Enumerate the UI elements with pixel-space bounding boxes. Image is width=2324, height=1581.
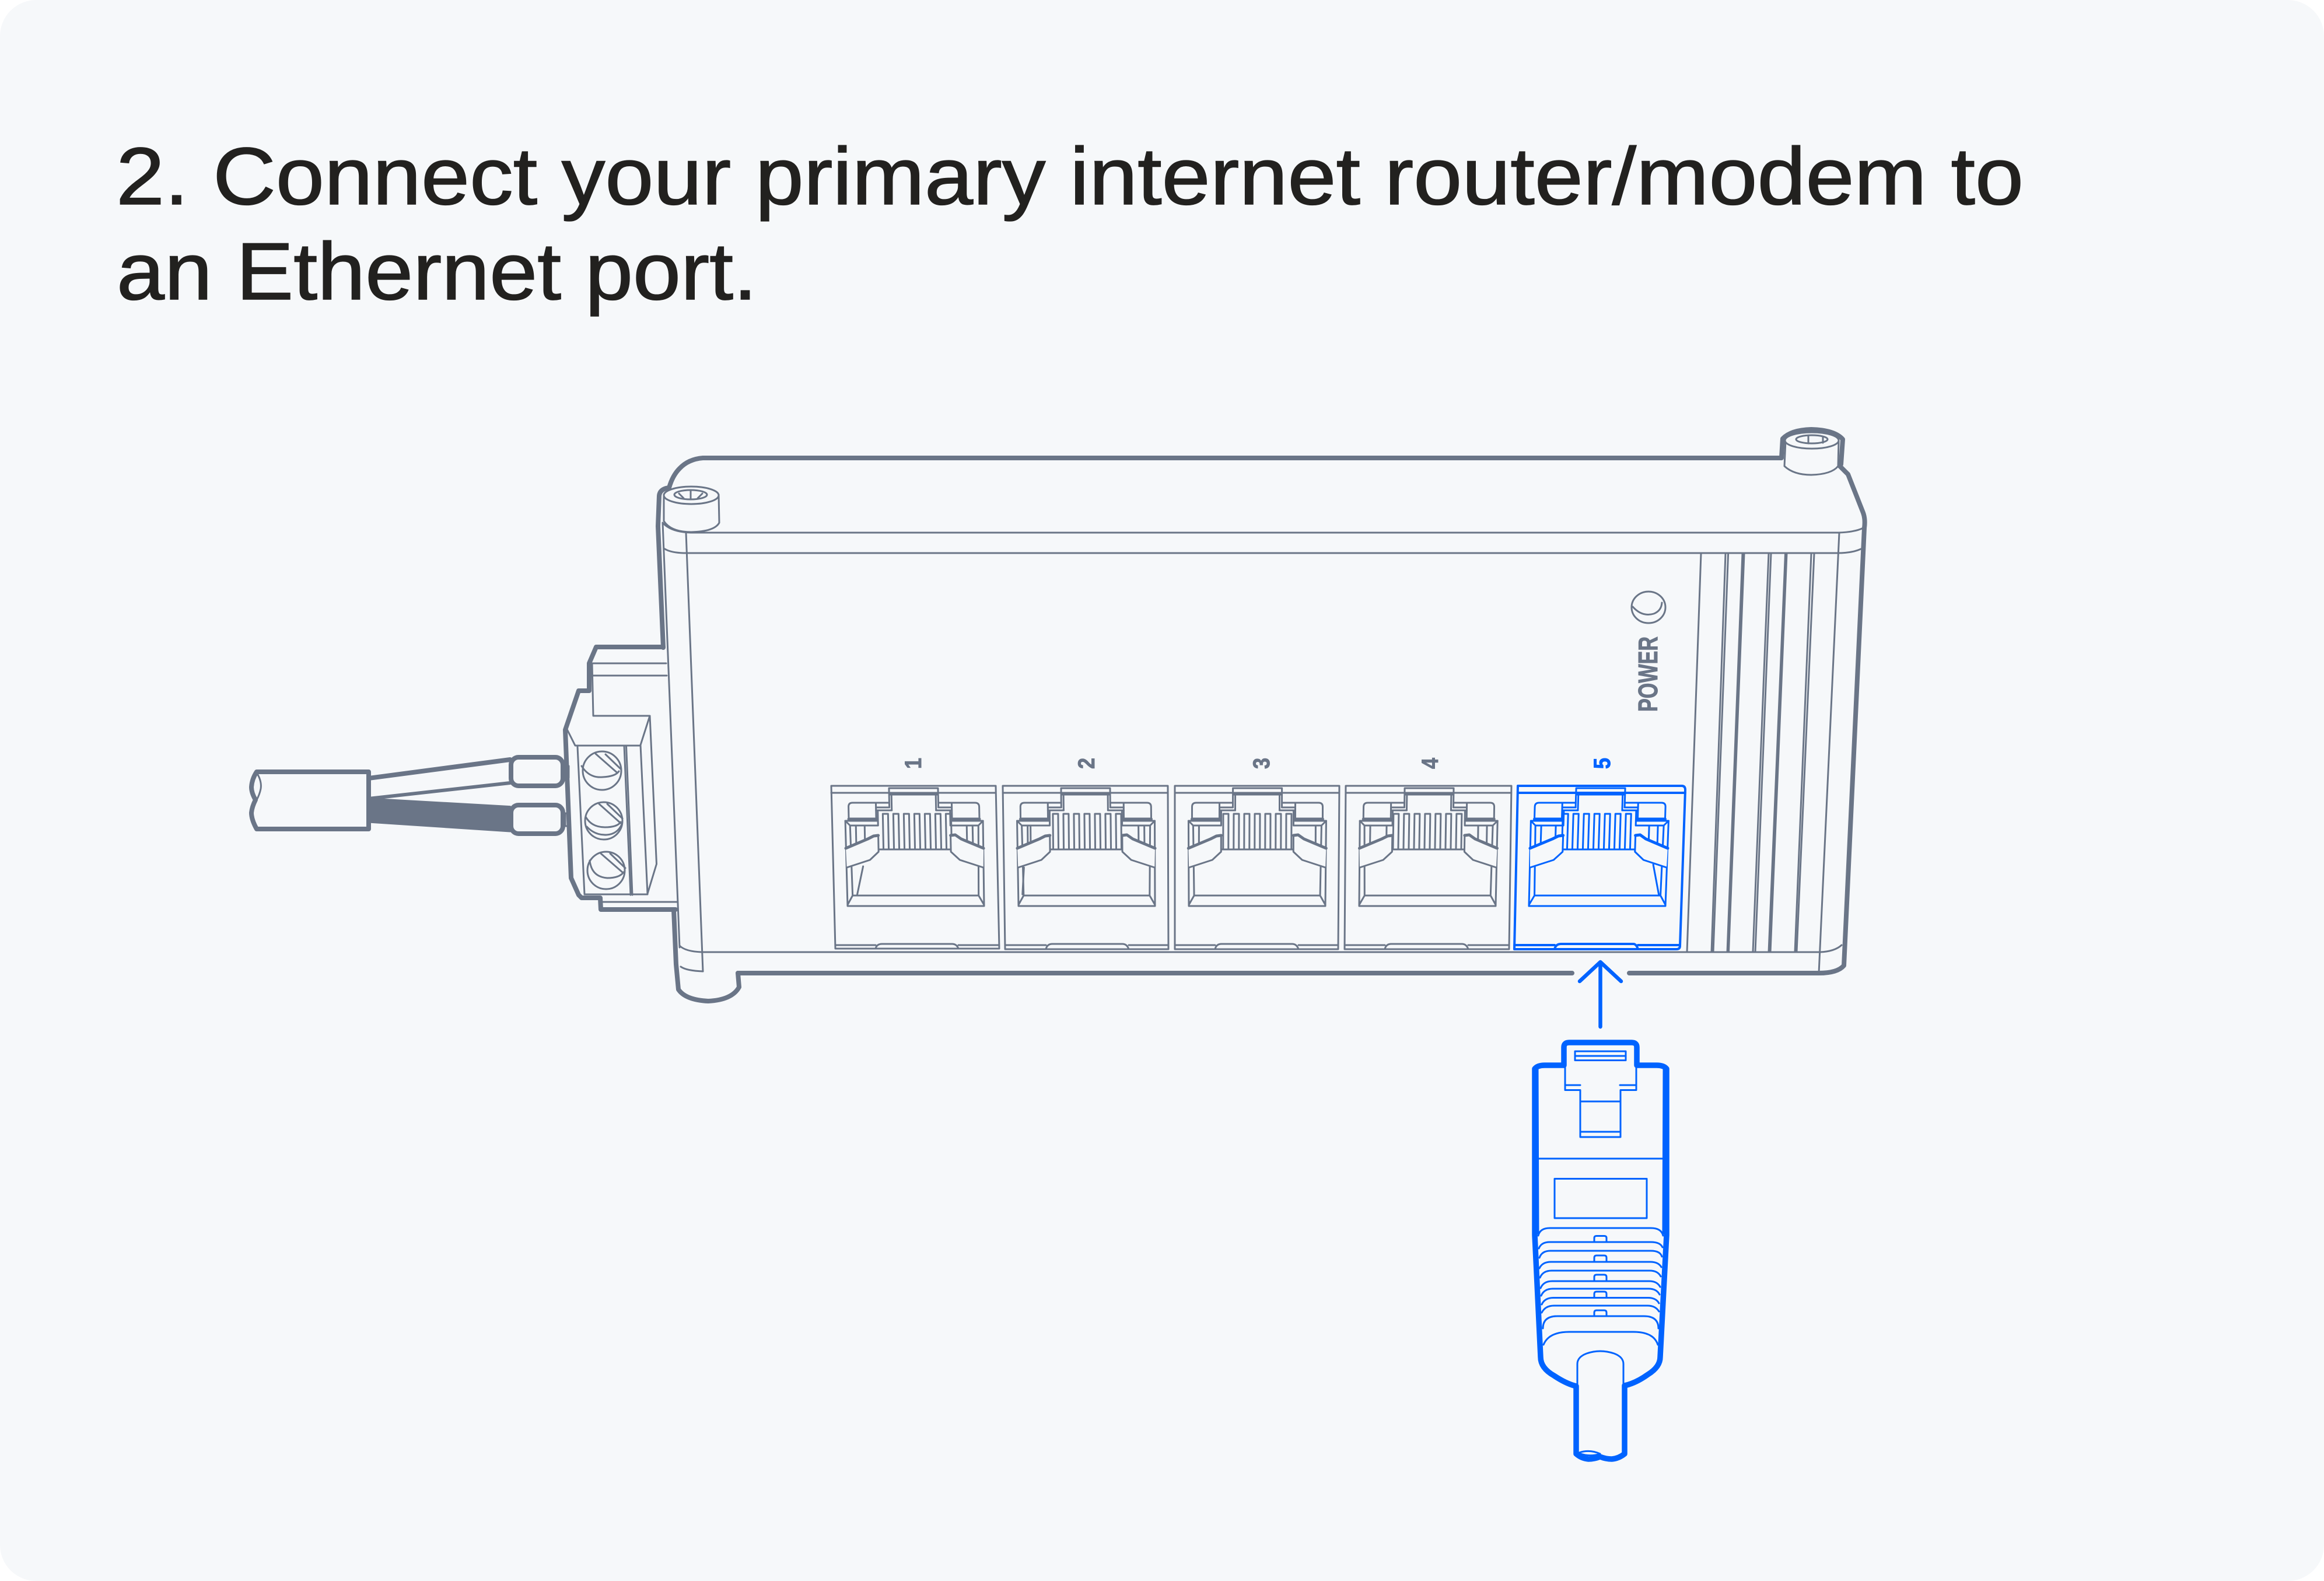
- ferrule upper: [511, 757, 569, 786]
- title: 2. Connect your primary internet router/modem to: [116, 131, 2024, 222]
- port 4: 4: [1418, 757, 1443, 769]
- arrow: insert direction: [1580, 962, 1621, 1027]
- port 1: [831, 758, 999, 949]
- screw: top right: [1782, 429, 1843, 475]
- lower wire: [369, 799, 510, 831]
- port 4: [1345, 757, 1511, 949]
- ferrule lower: [511, 805, 570, 834]
- terminal block and power cable: [251, 647, 677, 910]
- device: network switch illustration: [658, 429, 1865, 1001]
- power LED: [1632, 592, 1665, 623]
- upper wire: [369, 760, 510, 799]
- device body outline: [658, 458, 1865, 1001]
- POWER label: POWER: [1633, 636, 1663, 712]
- plug cable: [1577, 1351, 1623, 1456]
- cooling fins: [1687, 554, 1814, 952]
- port 2: [1003, 758, 1168, 949]
- connector bracket and block outline: [565, 647, 677, 910]
- terminal screw 1: [582, 751, 621, 790]
- cable sleeve: [251, 772, 369, 829]
- plug outer outline: [1535, 1043, 1667, 1459]
- title: an Ethernet port.: [117, 226, 757, 317]
- plug latch: [1565, 1051, 1636, 1137]
- plug ribs: [1538, 1228, 1663, 1345]
- port 1: 1: [901, 758, 926, 769]
- screw: top left: [664, 487, 719, 532]
- port 5: highlighted: 5: [1590, 758, 1615, 769]
- terminal screw 2: [585, 802, 622, 840]
- RJ45 ethernet plug: [1535, 1043, 1667, 1459]
- terminal screw 3: [587, 852, 625, 889]
- title: [116, 131, 2024, 317]
- port 5: highlighted: [1514, 758, 1685, 949]
- port 3: 3: [1249, 758, 1275, 769]
- port 2: 2: [1074, 758, 1100, 769]
- port 3: [1175, 758, 1339, 949]
- plug divider and label window: [1538, 1069, 1664, 1234]
